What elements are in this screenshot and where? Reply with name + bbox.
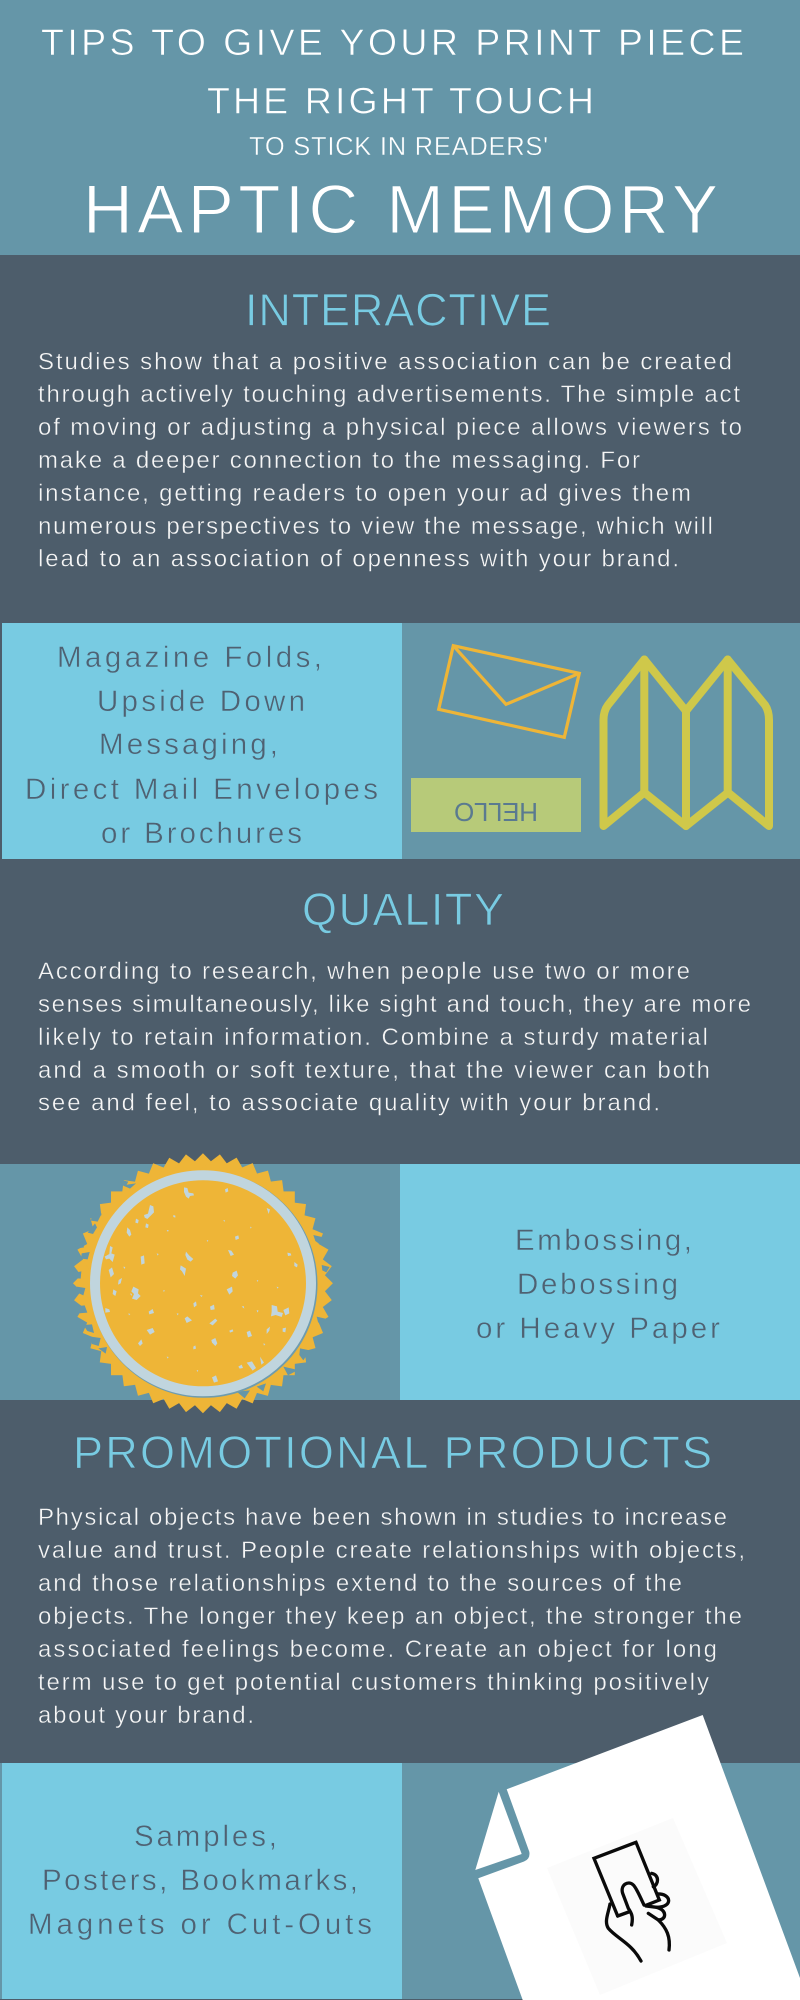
list: interactive formats: or Brochures: [101, 817, 302, 850]
list: interactive formats: [2, 623, 402, 859]
list: promotional formats: Magnets or Cut-Outs: [28, 1908, 372, 1941]
list: quality formats: Debossing: [517, 1268, 678, 1301]
text block: promotional body: Physical objects have been shown in studies to increase: [38, 1504, 727, 1531]
text block: promotional body: [38, 1504, 745, 1729]
list: quality formats: or Heavy Paper: [476, 1312, 720, 1345]
panel: interactive examples: [0, 623, 800, 859]
text block: interactive body: lead to an association of openness with your brand.: [38, 546, 679, 572]
icon: paper with hand holding card: [475, 1715, 800, 2000]
panel: promotional examples: [0, 1763, 800, 1999]
list: interactive formats: Messaging,: [99, 728, 278, 761]
list: quality formats: [400, 1164, 800, 1400]
icon: folded brochure: [604, 660, 769, 826]
list: promotional formats: Samples,: [134, 1820, 277, 1853]
title: haptic memory: HAPTIC MEMORY: [83, 171, 718, 248]
title: tips line 1: TIPS TO GIVE YOUR PRINT PIECE: [41, 21, 744, 63]
panel: promotional products: [0, 1400, 800, 1764]
heading: quality: QUALITY: [302, 884, 504, 935]
text block: interactive body: through actively touching advertisements. The simple act: [38, 381, 740, 408]
text block: quality body: see and feel, to associate quality with your brand.: [38, 1090, 660, 1116]
icon: upside-down hello card: HELLO: [454, 797, 538, 827]
list: interactive formats: Upside Down: [97, 685, 305, 718]
list: interactive formats: Magazine Folds,: [57, 641, 322, 674]
list: interactive formats: Direct Mail Envelopes: [25, 773, 378, 806]
title: tips line 2: THE RIGHT TOUCH: [207, 80, 594, 122]
text block: interactive body: [38, 348, 742, 572]
icon: upside-down hello card: [411, 778, 581, 832]
text block: quality body: [38, 958, 751, 1116]
list: promotional formats: Posters, Bookmarks,: [42, 1864, 358, 1897]
panel: quality: [0, 859, 800, 1164]
list: promotional formats: [2, 1763, 402, 1999]
icon: envelope: [439, 646, 579, 737]
text block: quality body: likely to retain information. Combine a sturdy material: [38, 1024, 708, 1051]
list: quality formats: Embossing,: [515, 1224, 692, 1257]
icon: distressed embossed seal: [72, 1153, 333, 1413]
panel: quality examples: [0, 1164, 800, 1400]
text block: quality body: senses simultaneously, like sight and touch, they are more: [38, 991, 751, 1018]
text block: interactive body: instance, getting readers to open your ad gives them: [38, 480, 691, 507]
panel: header: [0, 0, 800, 255]
text block: promotional body: about your brand.: [38, 1702, 254, 1729]
subtitle: TO STICK IN READERS': [249, 133, 548, 161]
text block: interactive body: make a deeper connection to the messaging. For: [38, 447, 640, 474]
panel: interactive: [0, 255, 800, 623]
text block: promotional body: term use to get potential customers thinking positively: [38, 1669, 709, 1696]
text block: promotional body: value and trust. People create relationships with objects,: [38, 1537, 745, 1564]
text block: interactive body: numerous perspectives to view the message, which will: [38, 513, 713, 540]
text block: interactive body: of moving or adjusting a physical piece allows viewers to: [38, 414, 742, 441]
heading: interactive: INTERACTIVE: [245, 284, 551, 336]
text block: promotional body: objects. The longer they keep an object, the stronger the: [38, 1603, 742, 1630]
text block: promotional body: and those relationships extend to the sources of the: [38, 1570, 682, 1597]
text block: interactive body: Studies show that a positive association can be created: [38, 348, 732, 376]
text block: promotional body: associated feelings become. Create an object for long: [38, 1636, 717, 1663]
heading: promotional products: PROMOTIONAL PRODUCTS: [73, 1427, 712, 1478]
text block: quality body: According to research, when people use two or more: [38, 958, 690, 985]
text block: quality body: and a smooth or soft texture, that the viewer can both: [38, 1057, 710, 1084]
